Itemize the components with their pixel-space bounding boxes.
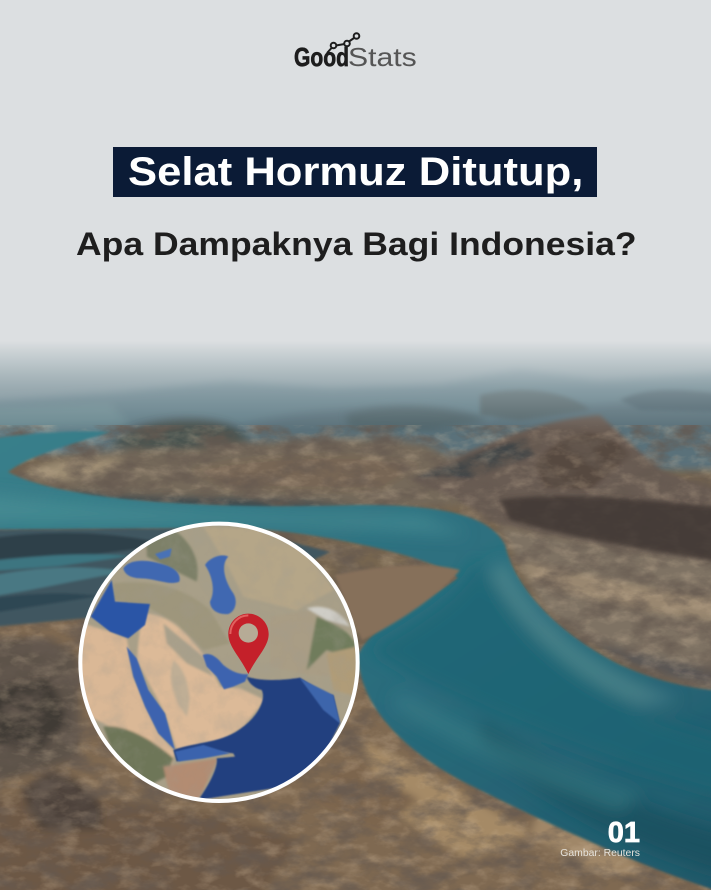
distant hazy hills (0, 368, 711, 470)
map terrain texture (82, 552, 344, 771)
black sea (123, 561, 180, 583)
map border (80, 524, 358, 801)
logo icon: trend line (327, 33, 359, 53)
land texture (0, 425, 711, 890)
logo word: Stats: Stats (348, 42, 417, 72)
title text: Selat Hormuz Ditutup, (128, 150, 583, 194)
mediterranean (91, 580, 150, 638)
map base (77, 520, 363, 807)
icon: red location pin (228, 614, 269, 674)
title box (113, 147, 597, 197)
delta on the left (0, 528, 460, 640)
upper plain (10, 406, 520, 512)
logo word: Good: Good (294, 42, 349, 72)
caspian sea (205, 555, 236, 614)
logo (294, 42, 417, 72)
gulf of aden (175, 745, 230, 762)
subtitle: Apa Dampaknya Bagi Indonesia? (76, 226, 637, 262)
haze fade into the top background (0, 0, 711, 430)
map inset circle (77, 520, 363, 807)
lower land (0, 612, 711, 890)
sea of azov (155, 548, 172, 559)
landscape land base (0, 340, 711, 890)
red sea (127, 647, 175, 750)
persian gulf (203, 654, 248, 689)
strait water (0, 431, 711, 890)
right mountains (410, 390, 711, 575)
page number: 01 (608, 817, 640, 849)
dark ridge on the right (500, 496, 711, 566)
image credit: Gambar: Reuters (560, 848, 640, 859)
right coastal plain (495, 525, 711, 700)
indian coast shallows (300, 678, 340, 723)
arabian sea (173, 677, 340, 800)
